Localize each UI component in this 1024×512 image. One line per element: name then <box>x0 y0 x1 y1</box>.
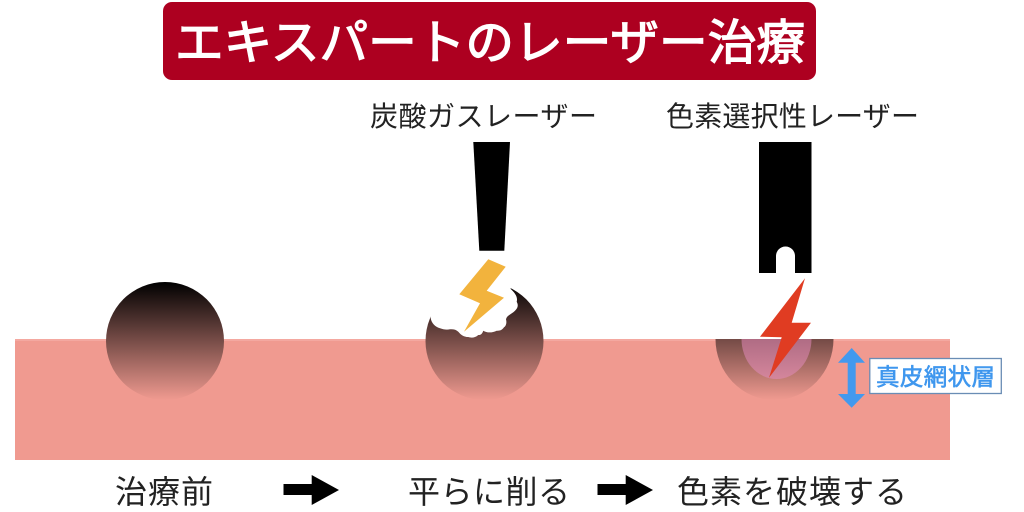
pigment lesion before treatment <box>106 282 224 400</box>
caption: destroy pigment: 色素を破壊する <box>677 474 907 510</box>
caption: shave flat: 平らに削る <box>408 474 570 510</box>
arrow: step two to step three <box>598 475 653 505</box>
title banner <box>163 2 816 80</box>
title banner: エキスパートのレーザー治療 <box>175 17 805 70</box>
icon: red lightning bolt <box>760 278 811 378</box>
icon: yellow lightning bolt <box>459 259 506 332</box>
pink treated zone <box>742 339 812 379</box>
label: carbon dioxide laser: 炭酸ガスレーザー <box>370 101 597 132</box>
label: reticular dermis: 真皮網状層 <box>876 364 995 390</box>
pigment lesion ring after pigment destruction <box>716 339 834 400</box>
laser tip: pigment-selective <box>759 142 812 273</box>
laser tip: carbon dioxide <box>473 142 510 251</box>
icon: blue double arrow <box>838 348 865 408</box>
pigment lesion after ablation <box>426 270 544 400</box>
label: reticular dermis <box>870 358 1001 394</box>
caption: before treatment: 治療前 <box>115 474 213 510</box>
label: pigment-selective laser: 色素選択性レーザー <box>666 101 919 132</box>
arrow: step one to step two <box>284 475 339 505</box>
skin layer <box>15 339 950 460</box>
white ablation cloud <box>431 270 518 338</box>
